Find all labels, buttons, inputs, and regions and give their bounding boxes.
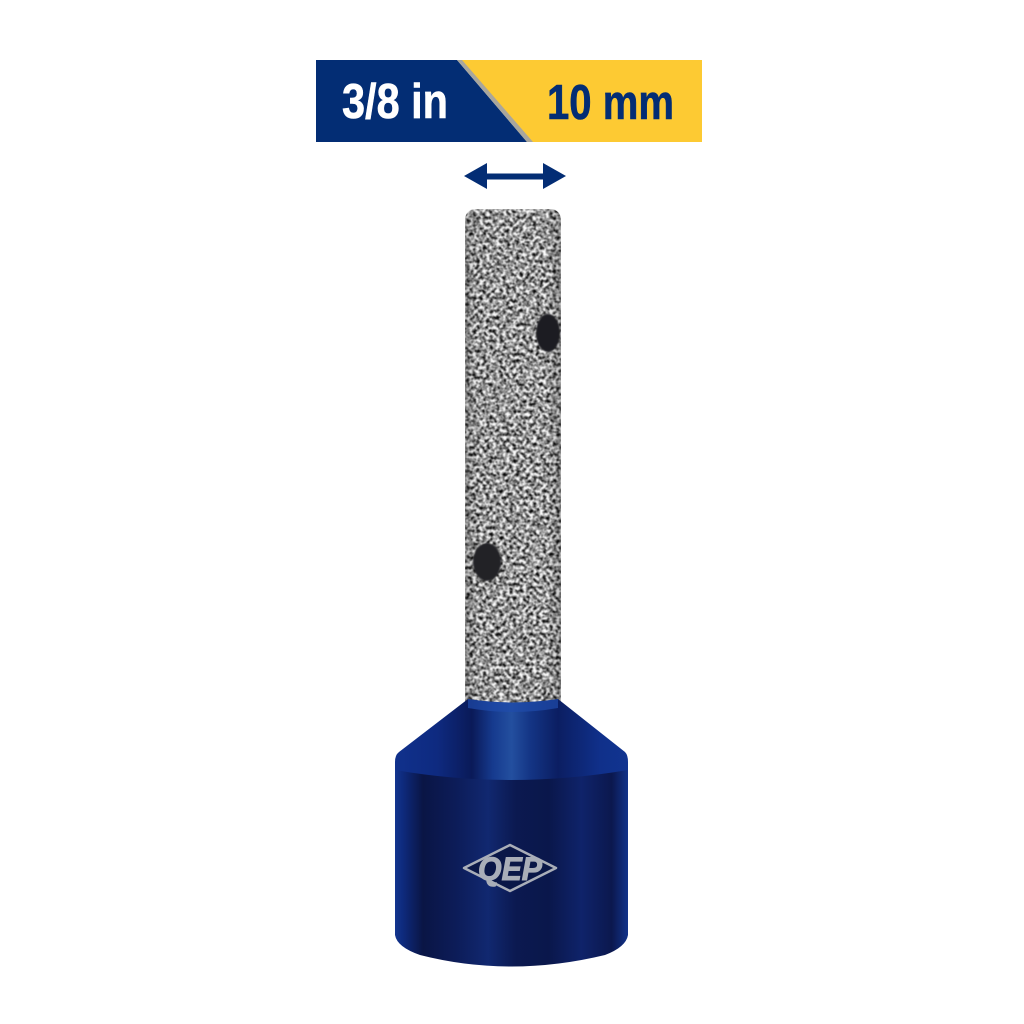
banner: grey diagonal divider xyxy=(457,60,533,142)
banner: yellow metric panel xyxy=(458,60,702,142)
hole: upper xyxy=(536,314,560,352)
drill bit xyxy=(395,209,628,966)
blue cone shoulder xyxy=(395,699,628,790)
banner: size label xyxy=(316,60,702,142)
arrow: diameter double arrow xyxy=(464,163,566,189)
logo diamond outline xyxy=(464,845,556,891)
brazed joint speckle xyxy=(468,699,558,712)
hole: lower xyxy=(473,543,501,581)
logo: QEP xyxy=(464,845,556,891)
text: metric size: 10 mm xyxy=(547,76,674,130)
diamond-coated shaft xyxy=(465,209,561,712)
text: imperial size: 3/8 in xyxy=(342,75,448,129)
logo text: QEP xyxy=(478,851,543,887)
blue cylinder body xyxy=(395,770,628,966)
banner: blue imperial panel xyxy=(316,60,527,142)
